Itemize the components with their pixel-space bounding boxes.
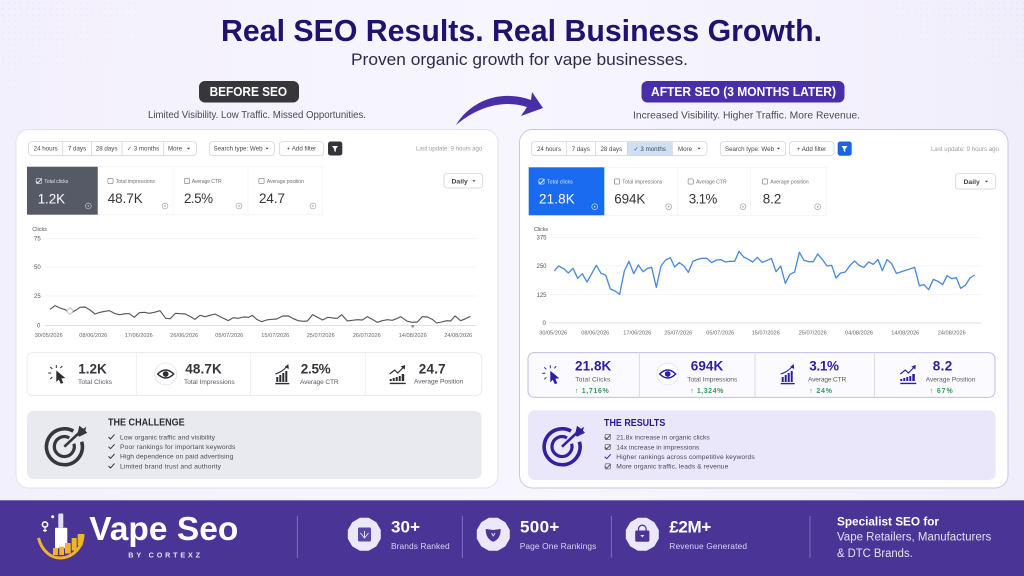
stats bar: after: ↑ 24%: [809, 388, 833, 395]
stats bar: after: ↑ 1,716%: [575, 388, 609, 395]
icon: shield: [478, 519, 509, 550]
line chart: clicks before: [32, 227, 477, 339]
daily dropdown: Daily: [964, 179, 980, 186]
line chart: clicks after: Clicks: [534, 227, 548, 233]
stat: page one rankings: [478, 518, 596, 551]
metric tiles: Average CTR: [192, 179, 222, 185]
callout: the results: 21.8x increase in organic clicks: [616, 434, 710, 441]
line chart: clicks before: 26/07/2026: [353, 333, 381, 339]
daily dropdown: [444, 173, 483, 188]
audience statement: Vape Retailers, Manufacturers: [837, 532, 992, 544]
stats bar: before: 1.2K: [78, 361, 107, 376]
before label: BEFORE SEO: [210, 85, 287, 99]
metric tiles: 48.7K: [108, 191, 143, 206]
toolbar: date range filters: More: [678, 146, 693, 153]
metric tiles: 3.1%: [689, 191, 717, 206]
line chart: clicks after: 30/05/2026: [539, 331, 567, 337]
callout: the challenge: High dependence on paid advertising: [120, 454, 234, 461]
line chart: clicks before: 0: [37, 324, 41, 330]
toolbar: date range filters: ✓ 3 months: [127, 146, 159, 153]
subtitle: Proven organic growth for vape businesses.: [351, 50, 688, 69]
toolbar: date range filters: + Add filter: [797, 146, 826, 153]
callout: the results: [528, 410, 996, 480]
toolbar: date range filters: Last update: 9 hours ago: [416, 146, 483, 153]
icon: bar growth: [781, 364, 795, 384]
icon: eye: [155, 363, 177, 385]
metric tiles: 2.5%: [184, 191, 213, 206]
callout: the challenge: [27, 411, 482, 479]
toolbar: date range filters: Search type: Web: [213, 146, 263, 153]
footer band: [0, 500, 1024, 576]
callout: the challenge: Limited brand trust and authority: [120, 463, 222, 470]
stats bar: before: Total Clicks: [78, 379, 113, 386]
callout: the results: THE RESULTS: [604, 418, 666, 429]
line chart: clicks after: 25/07/2026: [799, 331, 827, 337]
metric tiles: Total impressions: [116, 179, 155, 185]
line chart: clicks before: 30/05/2026: [35, 333, 63, 339]
toolbar: date range filters: 24 hours: [34, 146, 58, 153]
line chart: clicks before: 24/08/2026: [444, 333, 472, 339]
toolbar: date range filters: 28 days: [96, 146, 117, 153]
panel: after SEO: [520, 130, 1008, 488]
before tagline: Limited Visibility. Low Traffic. Missed Opportunities.: [148, 110, 366, 121]
line chart: clicks after: 25/07/2026: [664, 331, 692, 337]
metric tiles: Total clicks: [44, 179, 69, 185]
metric tiles: 8.2: [763, 191, 781, 206]
toolbar: date range filters: + Add filter: [287, 146, 316, 153]
stats bar: after: Total Impressions: [687, 376, 738, 383]
stats bar: before: 24.7: [419, 361, 446, 376]
line chart: clicks after: 17/06/2026: [623, 331, 651, 337]
line chart: clicks before: 15/07/2026: [261, 333, 289, 339]
metric tiles: [529, 167, 826, 215]
icon: bar growth: [275, 364, 289, 384]
callout: the results: More organic traffic, leads & revenue: [616, 464, 729, 471]
icon: click: [48, 365, 65, 384]
icon: line growth: [900, 365, 916, 383]
toolbar: date range filters: 28 days: [600, 146, 622, 153]
panel: before SEO: [16, 130, 498, 488]
callout: the challenge: Low organic traffic and visibility: [120, 434, 216, 441]
toolbar: date range filters: 24 hours: [537, 146, 561, 153]
stats bar: after: 21.8K: [575, 358, 612, 373]
stat: revenue generated: [627, 518, 747, 551]
stats bar: after: 694K: [691, 358, 724, 373]
line chart: clicks after: [534, 227, 981, 337]
stats bar: before: Average Position: [414, 378, 464, 386]
stat: brands ranked: [349, 518, 450, 551]
stats bar: before: Average CTR: [300, 379, 339, 386]
audience statement: & DTC Brands.: [837, 548, 913, 560]
after label: AFTER SEO (3 MONTHS LATER): [651, 85, 836, 99]
toolbar: date range filters: ✓ 3 months: [634, 146, 666, 153]
stats bar: after: Average Position: [926, 376, 976, 383]
line chart: clicks after: 375: [536, 236, 547, 242]
stat: page one rankings: 500+: [520, 518, 559, 537]
metric tiles: 1.2K: [38, 191, 65, 206]
toolbar: date range filters: 7 days: [68, 146, 86, 153]
line chart: clicks before: 26/06/2026: [170, 333, 198, 339]
metric tiles: 694K: [614, 191, 645, 206]
logo: BY CORTEXZ: [128, 551, 201, 560]
line chart: clicks after: 0: [542, 321, 546, 327]
after label: [642, 81, 844, 102]
line chart: clicks after: 04/08/2026: [845, 331, 873, 337]
stats bar: before: 2.5%: [301, 361, 331, 376]
stats bar: after: 3.1%: [809, 358, 839, 373]
callout: the results: 14x increase in impressions: [616, 444, 700, 451]
line chart: clicks before: Clicks: [32, 227, 47, 233]
title: Real SEO Results. Real Business Growth.: [221, 13, 822, 48]
icon: vape bottle and growth bars: [38, 514, 83, 558]
daily dropdown: [955, 174, 996, 189]
line chart: clicks before: 08/06/2026: [79, 333, 107, 339]
icon: target: [544, 426, 585, 465]
stat: brands ranked: Brands Ranked: [391, 541, 450, 551]
toolbar: date range filters: 7 days: [572, 146, 590, 153]
metric tiles: Average CTR: [696, 180, 727, 186]
callout: the results: Higher rankings across competitive keywords: [616, 454, 755, 461]
stat: revenue generated: £2M+: [669, 518, 711, 537]
metric tiles: 24.7: [259, 191, 285, 206]
metric tiles: Total impressions: [622, 180, 663, 186]
icon: eye: [657, 363, 679, 385]
toolbar: date range filters: Search type: Web: [725, 146, 775, 153]
line chart: clicks before: 25: [34, 294, 41, 300]
stat: revenue generated: Revenue Generated: [669, 541, 747, 551]
line chart: clicks after: 125: [536, 293, 547, 299]
stats bar: before: [27, 353, 482, 396]
before label: [199, 81, 299, 102]
icon: click: [542, 365, 559, 384]
stats bar: after: ↑ 1,324%: [690, 388, 724, 395]
line chart: clicks before: 25/07/2026: [307, 333, 335, 339]
stat: page one rankings: Page One Rankings: [520, 541, 596, 551]
line chart: clicks after: 08/06/2026: [581, 331, 609, 337]
daily dropdown: Daily: [452, 178, 468, 185]
icon: brand badge: [349, 519, 380, 550]
logo: Vape Seo: [89, 510, 238, 547]
line chart: clicks after: 14/08/2026: [891, 331, 919, 337]
toolbar: date range filters: More: [168, 146, 183, 153]
stats bar: after: 8.2: [933, 358, 952, 373]
toolbar: date range filters: [531, 142, 1000, 156]
audience statement: [837, 516, 992, 560]
metric tiles: [27, 167, 323, 215]
line chart: clicks after: 05/07/2026: [706, 331, 734, 337]
arrow: before to after: [456, 92, 543, 125]
metric tiles: Total clicks: [547, 180, 573, 186]
icon: line growth: [390, 365, 406, 383]
audience statement: Specialist SEO for: [837, 516, 940, 528]
toolbar: date range filters: [28, 142, 483, 156]
stat: brands ranked: 30+: [391, 518, 420, 537]
icon: shopping bag: [627, 519, 658, 550]
stats bar: after: [528, 353, 995, 397]
line chart: clicks before: 75: [34, 236, 41, 242]
stats bar: after: Total Clicks: [575, 376, 611, 383]
line chart: clicks before: 14/08/2026: [399, 333, 427, 339]
line chart: clicks before: 05/07/2026: [215, 333, 243, 339]
stats bar: after: Average CTR: [808, 376, 847, 383]
stats bar: after: ↑ 67%: [930, 388, 953, 395]
metric tiles: Average position: [770, 180, 809, 186]
line chart: clicks before: 17/06/2026: [125, 333, 153, 339]
stats bar: before: 48.7K: [185, 361, 222, 376]
after tagline: Increased Visibility. Higher Traffic. More Revenue.: [633, 110, 860, 122]
line chart: clicks after: 15/07/2026: [752, 331, 780, 337]
line chart: clicks after: 250: [536, 264, 547, 270]
page background: [2, 2, 1024, 82]
line chart: clicks after: 24/08/2026: [938, 331, 966, 337]
callout: the challenge: Poor rankings for important keywords: [120, 444, 236, 451]
logo: [38, 510, 238, 560]
icon: target: [46, 426, 87, 465]
line chart: clicks before: 50: [34, 265, 41, 271]
stats bar: before: Total Impressions: [184, 379, 235, 386]
metric tiles: 21.8K: [539, 191, 575, 206]
toolbar: date range filters: Last update: 9 hours ago: [931, 146, 1000, 153]
metric tiles: Average position: [267, 179, 304, 185]
callout: the challenge: THE CHALLENGE: [108, 418, 185, 428]
